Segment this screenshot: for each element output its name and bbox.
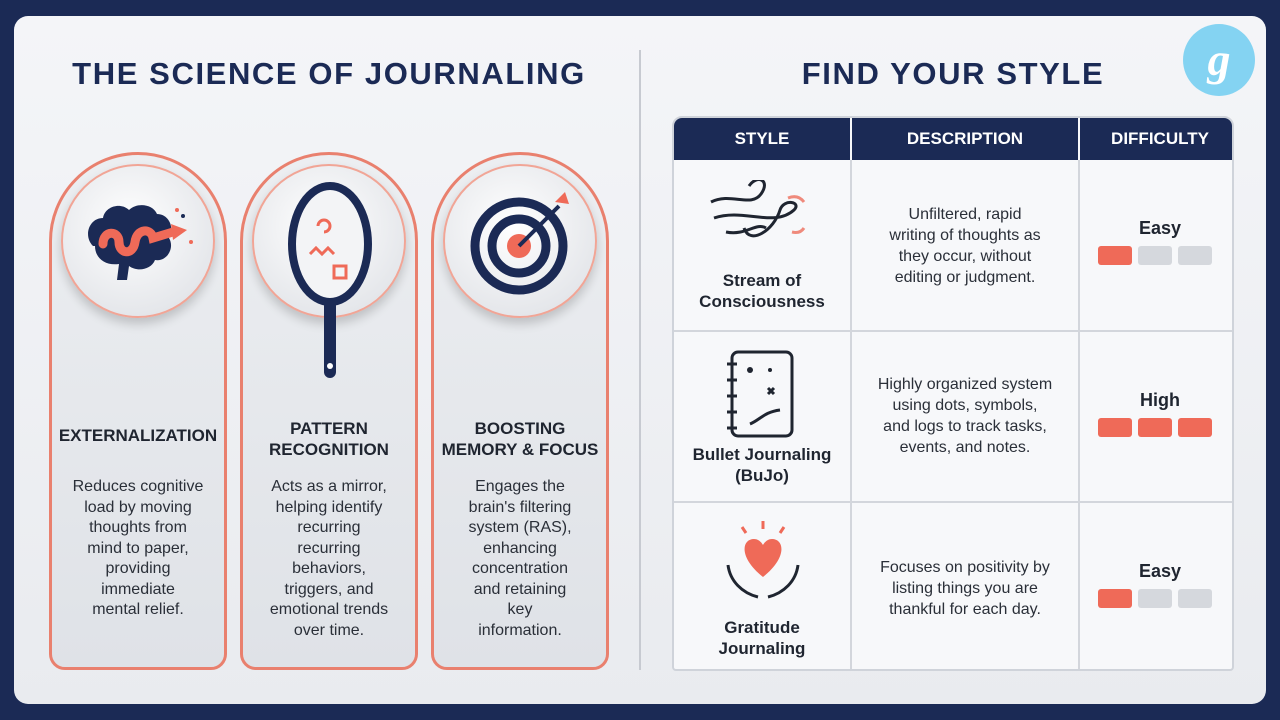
table: styles: DIFFICULTY: [1111, 129, 1209, 148]
icon: mirror: [252, 164, 406, 318]
text: information.: [478, 622, 562, 638]
row: stream of consciousness: Easy: [1139, 218, 1181, 238]
heading: EXTERNALIZATION: [59, 426, 217, 445]
text: Acts as a mirror,: [271, 478, 387, 495]
row: stream of consciousness: Unfiltered, rapid: [909, 206, 1021, 223]
heading: BOOSTING: [475, 419, 565, 438]
logo: g: [1208, 34, 1230, 85]
icon: heart hands: [726, 521, 800, 598]
text: over time.: [294, 622, 364, 638]
table: styles: DESCRIPTION: [907, 129, 1023, 148]
row: stream of consciousness: writing of thoughts as: [889, 227, 1041, 244]
text: concentration: [472, 560, 568, 577]
text: providing: [106, 560, 170, 577]
title: science of journaling: THE SCIENCE OF JOURNALING: [72, 56, 586, 91]
text: triggers, and: [285, 580, 373, 598]
panel: externalization: [49, 152, 227, 670]
row: stream of consciousness: Consciousness: [699, 292, 825, 311]
row: gratitude: Journaling: [719, 639, 805, 658]
icon: notebook: [727, 350, 794, 438]
row: bullet journaling: events, and notes.: [900, 439, 1030, 456]
text: mental relief.: [92, 601, 184, 618]
row: stream of consciousness: they occur, without: [899, 248, 1031, 265]
row: bullet journaling: using dots, symbols,: [893, 397, 1037, 414]
text: Reduces cognitive: [73, 478, 203, 495]
text: thoughts from: [89, 519, 187, 536]
icon: brain: [61, 164, 215, 318]
text: and retaining: [474, 580, 566, 598]
text: key: [508, 601, 532, 618]
row: stream of consciousness: [674, 160, 1232, 332]
text: recurring: [297, 519, 361, 536]
row: gratitude: Easy: [1139, 561, 1181, 581]
row: gratitude: Focuses on positivity by: [880, 559, 1050, 576]
row: bullet journaling: High: [1140, 390, 1180, 410]
divider: [639, 50, 641, 670]
row: stream of consciousness: Stream of: [723, 271, 801, 290]
panel: boosting memory: [431, 152, 609, 670]
text: [73, 478, 203, 618]
text: [270, 478, 388, 638]
text: [468, 478, 572, 638]
text: mind to paper,: [87, 540, 189, 556]
row: bullet journaling: Bullet Journaling: [693, 445, 831, 464]
text: immediate: [101, 580, 175, 598]
row: bullet journaling: and logs to track tasks,: [883, 418, 1047, 435]
text: behaviors,: [292, 560, 366, 577]
text: load by moving: [84, 498, 192, 516]
header: [674, 118, 850, 160]
heading: MEMORY & FOCUS: [442, 440, 598, 459]
text: enhancing: [483, 540, 557, 556]
text: brain's filtering: [469, 498, 571, 516]
table: styles: [672, 116, 1234, 671]
row: gratitude: [718, 503, 1212, 669]
row: bullet journaling: [674, 332, 1232, 503]
text: helping identify: [276, 498, 382, 516]
row: gratitude: thankful for each day.: [889, 601, 1041, 618]
heading: [442, 419, 598, 459]
icon: stream: [710, 180, 806, 238]
header: STYLE: [735, 129, 789, 148]
row: gratitude: Gratitude: [724, 618, 800, 637]
text: Engages the: [475, 478, 565, 495]
row: gratitude: listing things you are: [892, 580, 1038, 597]
row: bullet journaling: Highly organized system: [878, 376, 1052, 393]
row: bullet journaling: (BuJo): [735, 466, 789, 485]
heading: RECOGNITION: [269, 440, 389, 459]
heading: PATTERN: [290, 419, 368, 438]
row: stream of consciousness: editing or judgment.: [895, 269, 1035, 286]
text: emotional trends: [270, 601, 388, 618]
text: recurring: [297, 540, 361, 556]
icon: target: [443, 164, 597, 318]
logo: [1183, 24, 1255, 96]
text: system (RAS),: [468, 519, 572, 536]
panel: pattern recognition: [240, 152, 418, 670]
heading: [269, 419, 389, 459]
title: find your style: FIND YOUR STYLE: [802, 56, 1104, 91]
